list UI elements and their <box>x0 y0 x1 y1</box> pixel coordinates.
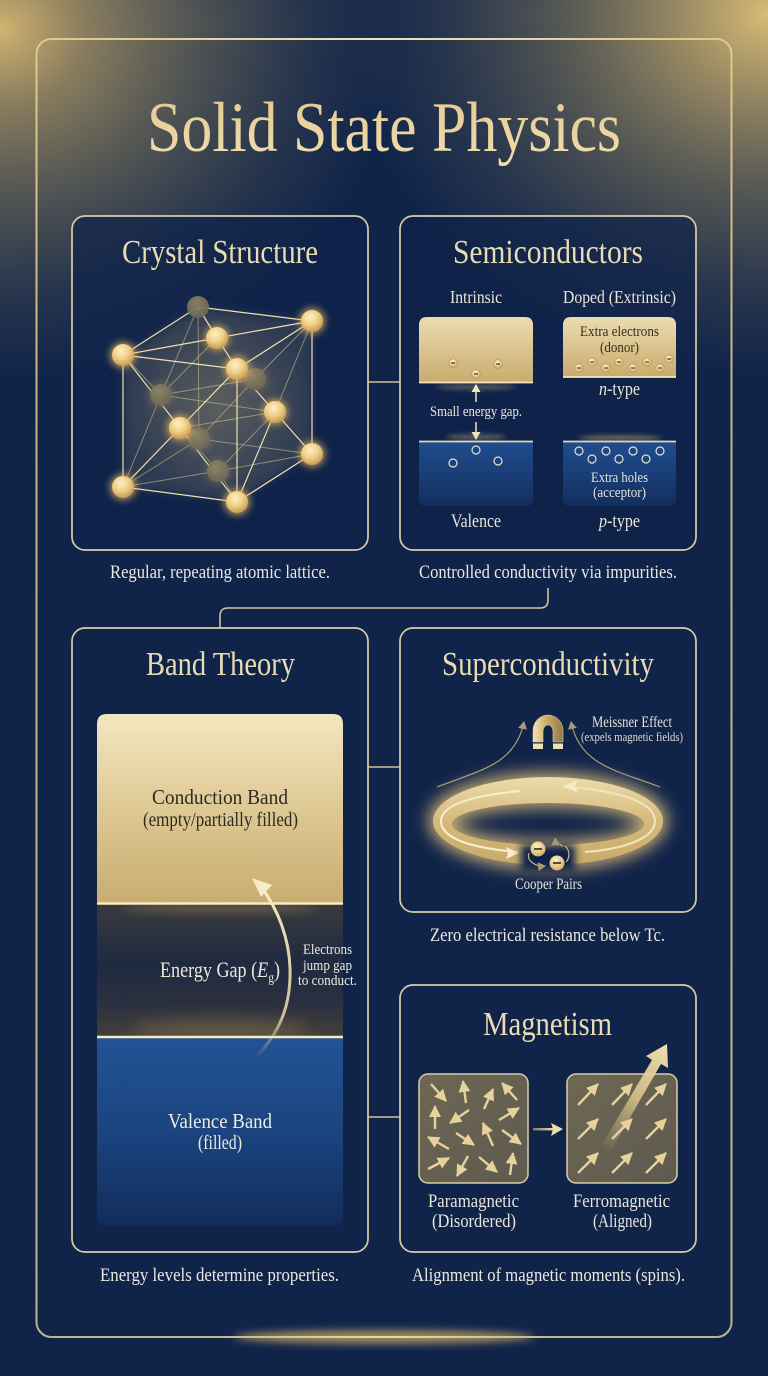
caption: band theory: Energy levels determine properties. <box>100 1265 339 1286</box>
connector: band theory to magnetism <box>368 1116 400 1118</box>
connector: crystal to semiconductors <box>368 381 400 383</box>
labels: magnetic states: (Disordered) <box>432 1212 516 1232</box>
doped column: Doped (Extrinsic) <box>563 287 676 308</box>
arrow: electron jump <box>252 878 290 1058</box>
label: meissner effect <box>581 714 683 744</box>
doped column: Extra electrons <box>580 324 659 340</box>
cooper pair electrons <box>528 842 569 870</box>
note: electrons jump gap: Electrons <box>303 942 352 958</box>
doped column <box>563 287 676 532</box>
labels: magnetic states: (Aligned) <box>593 1212 652 1232</box>
energy gap: Energy Gap (E <box>160 957 278 982</box>
caption: semiconductors: Controlled conductivity via impurities. <box>419 562 677 583</box>
labels: magnetic states: Paramagnetic <box>428 1192 519 1212</box>
intrinsic column <box>419 287 533 532</box>
ferromagnetic box <box>567 1044 677 1183</box>
label: meissner effect: (expels magnetic fields) <box>581 730 683 744</box>
connector: band theory to superconductivity <box>368 766 400 768</box>
paramagnetic box <box>419 1074 528 1183</box>
label: meissner effect: Meissner Effect <box>592 714 673 731</box>
icon: magnet <box>533 715 563 749</box>
doped column: p-type <box>597 512 640 532</box>
connector: semiconductors to band theory <box>220 588 548 628</box>
note: electrons jump gap: jump gap <box>302 958 352 974</box>
energy gap: ) <box>274 957 280 982</box>
valence band <box>97 1037 343 1226</box>
intrinsic column: Intrinsic <box>450 287 502 307</box>
energy gap <box>97 903 343 1040</box>
crystal lattice diagram <box>110 296 324 514</box>
caption: superconductivity: Zero electrical resistance below Tc. <box>430 925 665 946</box>
valence band: (filled) <box>198 1133 242 1154</box>
intrinsic column: Valence <box>451 512 501 532</box>
caption: magnetism: Alignment of magnetic moments (spins). <box>412 1265 685 1286</box>
heading: semiconductors: Semiconductors <box>453 234 643 271</box>
panel: semiconductors <box>400 216 696 550</box>
note: electrons jump gap: to conduct. <box>298 973 357 989</box>
doped column: (donor) <box>600 340 639 356</box>
conduction band: (empty/partially filled) <box>143 810 298 831</box>
heading: band theory: Band Theory <box>146 646 295 683</box>
valence band: Valence Band <box>168 1109 272 1133</box>
arrow: paramagnetic to ferromagnetic <box>533 1123 563 1136</box>
label: cooper pairs: Cooper Pairs <box>515 876 582 893</box>
energy gap: g <box>268 971 274 986</box>
heading: crystal structure: Crystal Structure <box>122 234 318 271</box>
note: electrons jump gap <box>298 942 357 989</box>
doped column: Extra holes <box>591 470 648 486</box>
doped column: (acceptor) <box>593 485 646 501</box>
labels: magnetic states <box>428 1192 670 1232</box>
panel: superconductivity <box>400 628 696 912</box>
conduction band: Conduction Band <box>152 785 288 809</box>
intrinsic column: Small energy gap. <box>430 404 522 420</box>
heading: magnetism: Magnetism <box>483 1006 612 1043</box>
title: Solid State Physics <box>147 89 621 167</box>
labels: magnetic states: Ferromagnetic <box>573 1192 670 1212</box>
caption: crystal structure: Regular, repeating atomic lattice. <box>110 562 330 583</box>
conduction band <box>97 714 343 903</box>
heading: superconductivity: Superconductivity <box>442 646 654 683</box>
panel: crystal structure <box>72 216 368 550</box>
doped column: n-type <box>599 380 640 400</box>
arrows: expelled field lines <box>437 722 660 787</box>
panel: magnetism <box>400 985 696 1252</box>
band edge lines <box>97 904 343 1037</box>
superconducting ring <box>433 777 663 871</box>
panel: band theory <box>72 628 368 1252</box>
